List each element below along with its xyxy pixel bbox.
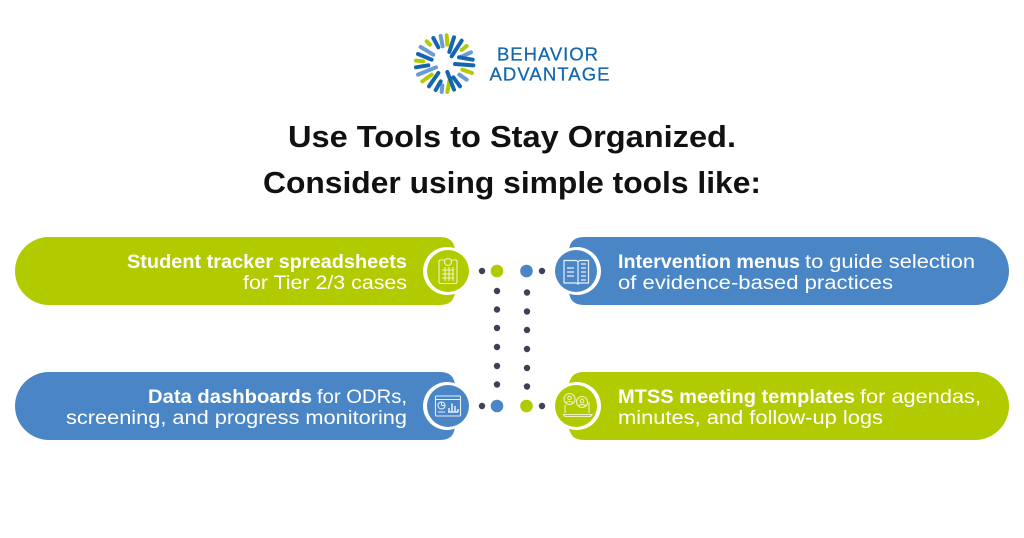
logo wordmark <box>490 44 610 84</box>
title: Use Tools to Stay Organized. <box>288 119 736 154</box>
logo wordmark: BEHAVIOR <box>497 44 598 64</box>
text: data dashboards: screening, and progress monitoring <box>66 408 407 429</box>
text: data dashboards: for ODRs, <box>317 387 407 408</box>
connector dots <box>479 265 545 412</box>
logo <box>416 35 610 92</box>
text: intervention menus: Intervention menus <box>618 252 800 273</box>
text: data dashboards: Data dashboards <box>148 387 312 408</box>
text: student tracker <box>127 252 407 294</box>
text: mtss meeting templates: minutes, and follow-up logs <box>618 408 883 429</box>
icon: open book <box>553 247 601 295</box>
text: mtss meeting templates: for agendas, <box>860 387 981 408</box>
title <box>263 119 761 200</box>
icon: laptop with meeting participants <box>553 382 601 430</box>
panel: mtss meeting templates <box>553 372 1009 440</box>
text: student tracker: for Tier 2/3 cases <box>243 273 407 294</box>
logo wordmark: ADVANTAGE <box>490 64 610 84</box>
text: mtss meeting templates: MTSS meeting templates <box>618 387 855 408</box>
icon: logo sunburst <box>416 35 473 92</box>
icon: clipboard with grid <box>423 247 471 295</box>
text: mtss meeting templates <box>618 387 981 429</box>
text: student tracker: Student tracker spreadsheets <box>127 252 407 273</box>
icon: dashboard window <box>423 382 471 430</box>
text: intervention menus: to guide selection <box>805 252 975 273</box>
panel: intervention menus <box>553 237 1009 305</box>
text: data dashboards <box>66 387 407 429</box>
text: intervention menus <box>618 252 975 294</box>
panel: student tracker spreadsheets <box>15 237 471 305</box>
panel: data dashboards <box>15 372 471 440</box>
title: Consider using simple tools like: <box>263 165 761 200</box>
text: intervention menus: of evidence-based practices <box>618 273 893 294</box>
